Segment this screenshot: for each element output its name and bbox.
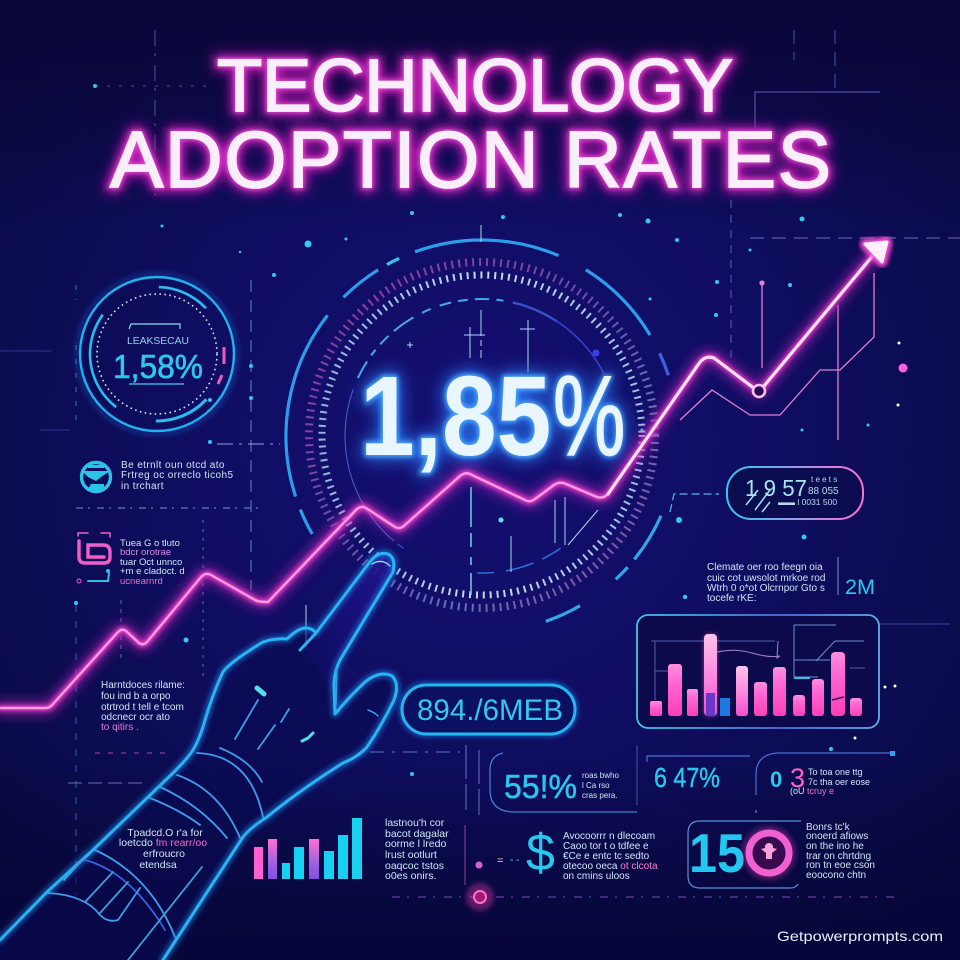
title: TECHNOLOGY: [217, 44, 733, 127]
value: 1,58%: [113, 348, 203, 385]
starfield dots: [74, 84, 900, 776]
pink dot right: [898, 364, 908, 372]
03 note: [790, 767, 870, 796]
text block: right of dollar: [563, 831, 658, 882]
big percentage figure: 1,85: [360, 354, 551, 480]
panel: 64% stat: [647, 756, 750, 793]
text block: wrist note: [119, 827, 207, 871]
rising trend line with arrow: [0, 242, 887, 708]
text block: left of dollar: o0es onirs.: [385, 870, 436, 882]
gauge inner tick ring: [322, 275, 642, 595]
text block: right of dollar: on cmins uloos: [563, 871, 630, 882]
icon: globe: [82, 462, 110, 492]
icon: dollar sign: $: [526, 824, 555, 882]
bracket above: [129, 324, 180, 329]
gauge inner crosshair lines: [306, 225, 598, 650]
pill stat: 894./6MEB: [402, 685, 575, 734]
finger nail: [372, 561, 390, 566]
text block: hand note: Harntdoces rilame:: [101, 680, 185, 691]
text block: wrist note: Tpadcd.O r'a for: [127, 827, 203, 839]
node: pink dot on connector: [476, 862, 482, 868]
panel inner thin lines: [651, 625, 865, 700]
text block: wrist note: loetcdo fm rearr/oo: [119, 837, 207, 849]
stat: 2M: 2M: [845, 576, 875, 599]
text block: 150 note: ron tn eoe cson: [806, 860, 875, 871]
small bar chart: [254, 818, 362, 879]
arrow head: [865, 242, 887, 262]
icon: dollar sign: =: [497, 855, 503, 867]
55% value: 55!%: [504, 768, 577, 805]
panel: 03 stat: 0: [770, 767, 782, 792]
text block: 150 note: onoerd afiows: [806, 831, 868, 842]
panel bars: [650, 701, 662, 716]
55% note: l Ca rso: [582, 781, 610, 790]
text block: climate note: cuic cot uwsolot mrkoe rod: [707, 573, 825, 584]
title: TECHNOLOGY: [217, 44, 733, 127]
text block: globe note: in trchart: [121, 481, 164, 492]
text block: device note: +m e cladoct. d: [120, 566, 185, 577]
text block: left of dollar: lastnou'h cor: [385, 817, 445, 829]
big percentage figure: %: [553, 353, 625, 479]
hand tendon lines: [235, 688, 313, 749]
03 note: 7c tha oer eose: [808, 777, 870, 787]
central gauge dial: [205, 159, 759, 713]
icon: dollar sign: - -: [510, 855, 519, 866]
text block: 150 note: trar on chrtdng: [806, 851, 871, 862]
text block: hand note: fou ind b a orpo: [101, 691, 171, 702]
text block: device note: Tuea G o tluto: [120, 538, 180, 549]
text block: left of dollar: oorme l lredo: [385, 838, 446, 850]
icon: pink device: [77, 533, 110, 583]
title: ADOPTION RATES: [110, 115, 831, 204]
pill small text: 88 055: [808, 486, 839, 497]
title: [110, 44, 831, 204]
pill number: 1 9 57: [745, 475, 807, 501]
footer attribution: Getpowerprompts.com: [777, 928, 943, 944]
text block: globe note: [121, 460, 233, 492]
node: bottom timeline ring: [466, 883, 494, 911]
big percentage figure: %: [553, 353, 625, 479]
text block: left of dollar: lrust ootlurt: [385, 849, 437, 861]
title: ADOPTION RATES: [110, 115, 831, 204]
text block: globe note: Frtreg oc orreclo ticoh5: [121, 470, 233, 481]
title: ADOPTION RATES: [110, 115, 831, 204]
text block: 150 note: [806, 822, 875, 881]
text block: left of dollar: bacot dagalar: [385, 828, 449, 840]
text block: hand note: to qitirs .: [101, 722, 139, 733]
text block: right of dollar: Avocoorrr n dlecoam: [563, 831, 655, 842]
hand outline: [0, 553, 397, 960]
03 note: To toa one ttg: [808, 767, 863, 777]
big percentage figure: %: [553, 353, 625, 479]
text block: device note: [120, 538, 185, 587]
panel: 64% stat: 6 47%: [654, 762, 720, 793]
icon: dollar sign: [497, 824, 555, 882]
gauge outer tick ring: [309, 262, 655, 608]
text block: climate note: [707, 562, 825, 604]
gauge outer arcs: [205, 159, 759, 713]
55% note: [582, 771, 619, 800]
03 note: (oU tcruy e: [790, 786, 834, 796]
text block: hand note: [101, 680, 185, 733]
panel: bar chart: [637, 615, 879, 728]
text block: device note: bdcr orotrae: [120, 547, 171, 558]
pill stat: top right: [727, 467, 863, 519]
node ring on trend line: [753, 385, 765, 397]
label: LEAKSECAU: [127, 336, 189, 347]
text block: wrist note: etendsa: [139, 859, 177, 871]
text block: climate note: Clemate oer roo feegn oia: [707, 562, 823, 573]
55% note: cras pera.: [582, 791, 618, 800]
right-side thin pink sub lines: [680, 273, 874, 440]
text block: right of dollar: Caoo tor t o tdfee e: [563, 841, 649, 852]
text block: right of dollar: €Ce e entc tc sedto: [563, 851, 650, 862]
connector to pill: [670, 494, 719, 512]
pill stat: 894./6MEB: 894./6MEB: [417, 694, 563, 727]
150 digits: 15: [689, 822, 745, 884]
stat: 2M: [838, 557, 875, 599]
text block: device note: tuar Oct unnco: [120, 557, 182, 568]
title: TECHNOLOGY: [217, 44, 733, 127]
panel: 03 stat: 3: [790, 763, 805, 793]
text block: right of dollar: otecoo oeca ot clcota: [563, 861, 658, 872]
gauge inner dashed ring: [291, 245, 673, 627]
text block: wrist note: erfroucro: [143, 848, 185, 860]
text block: 150 note: on the ino he: [806, 841, 864, 852]
text block: left of dollar: oaqcoc tstos: [385, 860, 444, 872]
text block: climate note: tocefe rKE:: [707, 593, 756, 604]
55% note: roas bwho: [582, 771, 619, 780]
text block: 150 note: Bonrs tc'k: [806, 822, 851, 833]
pill small text: t e e t s: [811, 475, 837, 484]
panel: 55% stat: [490, 753, 637, 812]
text block: climate note: Wtrh 0 o*ot Olcrnpor Gto s: [707, 583, 825, 594]
icon: pink badge: [742, 826, 796, 880]
text block: hand note: odcnecr ocr ato: [101, 712, 170, 723]
text block: globe note: Be etrnlt oun otcd ato: [121, 460, 225, 471]
panel: 150 stat: [688, 821, 801, 888]
big percentage figure: 1,85: [360, 354, 551, 480]
text block: hand note: otrtrod t tell e tcom: [101, 702, 184, 713]
wrist bands: [48, 748, 263, 960]
text block: 150 note: eoocono chtn: [806, 870, 866, 881]
inner thumb line: [336, 668, 378, 716]
big percentage figure: 1,85: [360, 354, 551, 480]
text block: device note: ucnearnrd: [120, 576, 163, 587]
pill small text: ▬▬ l 0031 500: [778, 497, 837, 507]
pill small text: [778, 475, 839, 507]
text block: left of dollar: [385, 817, 449, 882]
circular stat: 1,58%: [62, 259, 252, 449]
panel: 03 stat: [756, 751, 895, 813]
